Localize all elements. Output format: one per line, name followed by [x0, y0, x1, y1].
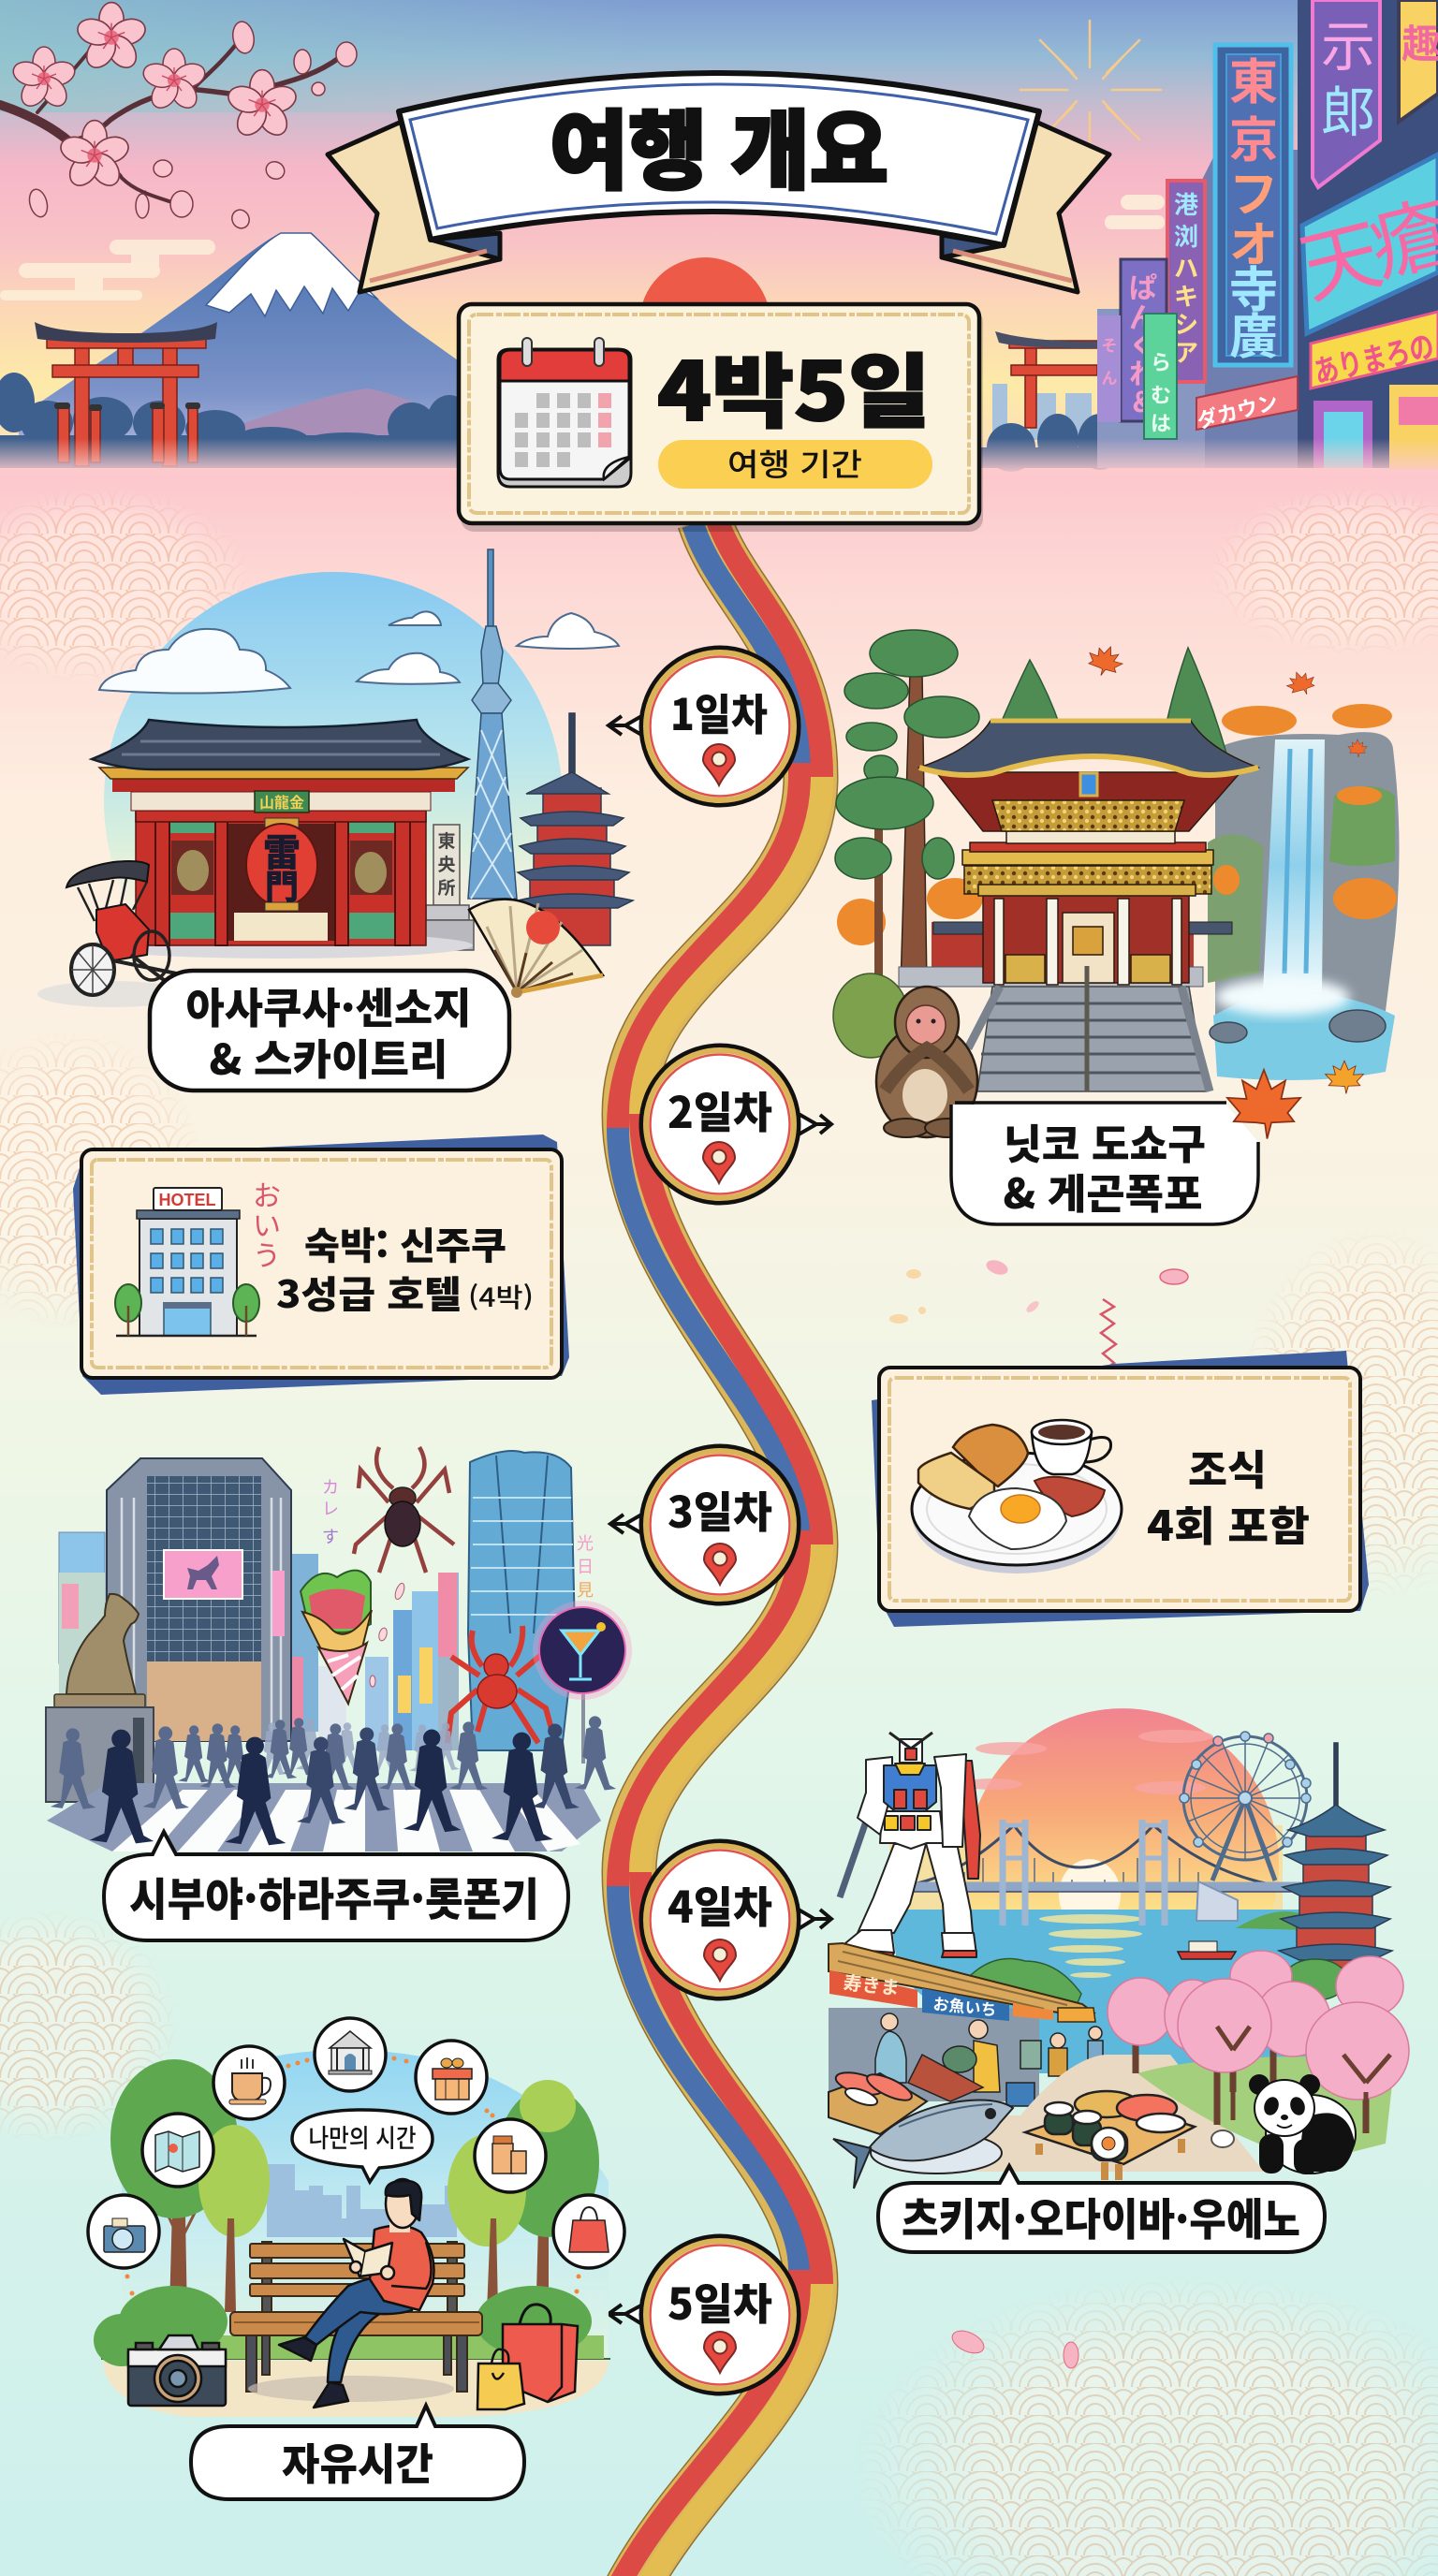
- lantern: 雷: [263, 823, 301, 877]
- sign: vertical blue: 京: [1229, 101, 1278, 171]
- green tree: [1284, 1959, 1347, 2000]
- dotted trail: [125, 2056, 580, 2295]
- banner face: [399, 73, 1039, 245]
- icon: hotel: HOTEL: [159, 1191, 216, 1209]
- banner tails: [328, 117, 1109, 292]
- white sun: [1059, 1859, 1121, 1910]
- cloud: header left: [0, 240, 215, 300]
- label: Asakusa: & 스카이트리: [210, 1026, 448, 1087]
- park sky: [122, 2050, 609, 2359]
- sign: vertical blue: フ: [1229, 155, 1278, 226]
- ribbon gold body: [629, 520, 811, 2576]
- sign: teal diagonal: 天: [1288, 191, 1392, 320]
- sign: vertical blue: 廣: [1229, 298, 1278, 368]
- sign: yellow top: [1399, 0, 1438, 122]
- title text: 여행 개요: [550, 82, 888, 207]
- ferry: [1178, 1941, 1236, 1959]
- spider dark: [354, 1447, 454, 1573]
- pagoda: [518, 713, 633, 945]
- lantern: 門: [265, 860, 299, 909]
- ribbon gold bands: [640, 777, 822, 2576]
- cedar trees: [835, 630, 979, 988]
- skytree: [468, 549, 517, 899]
- label: Tsukiji: 츠키지·오다이바·우에노: [902, 2184, 1300, 2248]
- person reading: [279, 2179, 434, 2408]
- sign: vertical blue: 寺: [1229, 251, 1278, 321]
- green bush behind roof: [966, 1958, 1081, 2005]
- sign: narrow pink: 港: [1174, 186, 1198, 221]
- stone monument: 央: [437, 851, 456, 876]
- grass: [1137, 2056, 1395, 2162]
- gate name plate: 山龍金: [259, 790, 304, 812]
- shopping bags: [477, 2305, 578, 2409]
- shrine wings: [932, 922, 1194, 978]
- scene: Tsukiji Odaiba Ueno: [829, 1708, 1409, 2252]
- panda: [1249, 2074, 1356, 2174]
- sky circle: [104, 572, 563, 1031]
- kana note: お: [253, 1173, 281, 1214]
- sign: purple mid: く: [1129, 323, 1157, 364]
- sign: green: む: [1151, 379, 1171, 409]
- clouds: [99, 611, 619, 694]
- pill: travel period: [658, 440, 932, 489]
- bush: [833, 973, 908, 1058]
- sign: pink canopy: ダカウン: [1194, 386, 1281, 434]
- icon: shops bubble: [475, 2119, 546, 2192]
- icon: calendar: [498, 338, 631, 487]
- day badge 5: [609, 2236, 799, 2393]
- pagoda: [1279, 1743, 1392, 1981]
- sign: narrow pink: キ: [1174, 278, 1198, 313]
- maple leaf: large: [1227, 1070, 1300, 1138]
- lantern: [246, 818, 317, 911]
- kana pink: カ: [322, 1474, 339, 1499]
- ground: [89, 932, 473, 959]
- day badge 1: [609, 648, 799, 805]
- sign: teal diagonal: [1288, 154, 1438, 333]
- label: Nikko: & 게곤폭포: [1004, 1161, 1202, 1221]
- sign: vertical blue: オ: [1229, 206, 1278, 276]
- tuna fish: [833, 2100, 1013, 2188]
- icon: hotel: [115, 1188, 259, 1336]
- back trees: [1000, 648, 1228, 760]
- speech bubble: my own time: 나만의 시간: [309, 2118, 416, 2155]
- city silhouette: [267, 2164, 457, 2237]
- kana pink: 光: [577, 1530, 594, 1555]
- crowd mid: [51, 1716, 616, 1809]
- stone monument: 東: [437, 827, 456, 853]
- duration card: [459, 304, 983, 532]
- blossoms: [1108, 1951, 1409, 2100]
- frieze: [112, 777, 455, 792]
- maple leaves: [1083, 641, 1367, 1093]
- hotel card: [73, 1134, 569, 1395]
- sign: small purple: [1097, 315, 1121, 422]
- day badge 2: 2일차: [668, 1079, 772, 1141]
- sign: purple mid: &: [1133, 379, 1153, 420]
- market sign blue: お魚いち: [932, 1991, 998, 2021]
- trunks: [1119, 2017, 1395, 2133]
- kana squiggle: [1093, 1299, 1116, 1387]
- torii gate left: [35, 322, 217, 466]
- crowd front: [90, 1730, 553, 1845]
- day badge 1: 1일차: [670, 681, 768, 743]
- hotel text: 3성급 호텔: [276, 1265, 462, 1319]
- label: Tsukiji: [878, 2166, 1325, 2252]
- pool: [1213, 992, 1395, 1080]
- spider red: [448, 1626, 554, 1743]
- pill: travel period: 여행 기간: [727, 440, 862, 485]
- kana pink: [322, 1474, 594, 1602]
- crosswalk: [47, 1783, 601, 1852]
- kana pink: す: [322, 1524, 339, 1548]
- label: Asakusa: [150, 971, 509, 1090]
- market: [829, 1943, 1264, 2172]
- ribbon: [618, 515, 822, 2576]
- sun clouds: [962, 1730, 1213, 1794]
- hotel text: 숙박: 신주쿠: [304, 1216, 506, 1270]
- kana pink: 日: [577, 1554, 594, 1578]
- street buildings: [290, 1554, 459, 1750]
- label: Nikko: 닛코 도쇼구: [1004, 1111, 1206, 1171]
- storefronts: [1313, 385, 1438, 469]
- label: Nikko: [951, 1103, 1258, 1224]
- day badge 4: 4일차: [668, 1874, 772, 1936]
- label: free time: [191, 2406, 524, 2499]
- rickshaw: [37, 861, 199, 1007]
- bridge: [898, 1820, 1301, 1925]
- sign: purple top: 郎: [1321, 68, 1375, 147]
- shrine roof: [919, 721, 1258, 831]
- ribbon blue bands: [618, 524, 800, 2270]
- sign: narrow pink: ア: [1174, 334, 1198, 369]
- stone monument: 所: [437, 874, 456, 900]
- scene: Asakusa and Skytree: [37, 549, 633, 1090]
- cherry blossom branch: [0, 3, 357, 231]
- duration text: 4박5일: [657, 327, 931, 444]
- label: free time: 자유시간: [282, 2431, 433, 2493]
- gundam robot: [840, 1733, 980, 1958]
- rice ball: [1211, 2130, 1234, 2147]
- label: Shibuya: [104, 1832, 568, 1940]
- market sign red: 寿きま: [843, 1968, 901, 2000]
- left side buildings: [59, 1532, 105, 1704]
- scene: free time: [88, 2018, 624, 2499]
- kana note: い: [253, 1203, 281, 1244]
- scene: Shibuya Harajuku Roppongi: [46, 1447, 632, 1940]
- hotel text: (4박): [468, 1278, 534, 1315]
- cloud: header right: [1105, 195, 1165, 229]
- sign: narrow pink: 浏: [1174, 218, 1198, 253]
- breakfast text: [1147, 1437, 1310, 1553]
- bench shadow: [248, 2376, 454, 2402]
- water: [889, 1910, 1306, 2073]
- icon: bag bubble: [553, 2195, 624, 2268]
- sign: narrow pink: シ: [1174, 306, 1198, 341]
- red sun: [639, 257, 770, 388]
- stone monument: [419, 825, 474, 950]
- icon: breakfast plate: [912, 1420, 1122, 1573]
- sign: green: ら: [1151, 346, 1171, 376]
- backdrop towers: [1097, 0, 1438, 468]
- steps: [968, 966, 1210, 1091]
- Hachiko statue: [46, 1594, 154, 1802]
- icon: camera bubble: [88, 2195, 159, 2268]
- sign: purple mid: [1121, 259, 1167, 421]
- kana pink: 見: [577, 1577, 594, 1602]
- breakfast text: 조식: [1188, 1437, 1267, 1497]
- speech bubble: my own time: [292, 2110, 433, 2182]
- market sign blue: [922, 1988, 1009, 2021]
- main building: [107, 1458, 291, 1741]
- icon: coffee bubble: [213, 2046, 285, 2119]
- breakfast card: [872, 1351, 1369, 1627]
- awning: [829, 1943, 1093, 2012]
- kana note: う: [253, 1233, 281, 1274]
- sunset disc: [966, 1708, 1279, 1910]
- day badge 3: 3일차: [668, 1479, 772, 1541]
- icon: vintage camera: [128, 2335, 226, 2406]
- sunset sky wash: [889, 1825, 1283, 1911]
- tower: [468, 1451, 575, 1750]
- sign: vertical blue: 東: [1229, 43, 1278, 113]
- title banner: [328, 73, 1109, 292]
- stall vendors: [875, 2013, 1103, 2106]
- sign: purple top: [1313, 0, 1380, 187]
- mountain: Fuji: [19, 233, 477, 459]
- shrine lower storey: [983, 894, 1189, 985]
- sign: small purple: そ: [1101, 332, 1118, 356]
- icon: gift bubble: [416, 2041, 487, 2114]
- sign: narrow pink: [1167, 181, 1205, 382]
- hotel text: [276, 1216, 534, 1319]
- sushi board: [1025, 2091, 1195, 2180]
- icon: map bubble: [142, 2114, 213, 2187]
- ferris wheel: [1180, 1732, 1311, 1881]
- icon: museum bubble: [315, 2018, 386, 2091]
- crepe: [301, 1571, 372, 1704]
- label: Asakusa: 아사쿠사·센소지: [185, 974, 472, 1035]
- kana pink: レ: [322, 1496, 339, 1520]
- green hill: [1236, 1911, 1311, 1930]
- tree line left: [0, 373, 477, 468]
- waterfall mist: [1215, 978, 1350, 1016]
- day badge 5: 5일차: [668, 2271, 772, 2333]
- rock cliff: [1215, 732, 1400, 1016]
- bench: [230, 2242, 482, 2392]
- day badge 2: [641, 1046, 831, 1203]
- sign: purple top: 示: [1321, 3, 1375, 81]
- sign: small purple: ん: [1101, 365, 1118, 388]
- market sign orange: [1013, 2003, 1053, 2020]
- petals near crepe: [370, 1582, 406, 1687]
- sign: green: は: [1151, 407, 1171, 437]
- crowd near: [297, 1723, 580, 1824]
- ribbon red bands: [618, 515, 822, 2576]
- folding fan: [469, 900, 603, 998]
- market sign red: [829, 1968, 917, 2008]
- neon buildings: [1097, 0, 1438, 469]
- sashimi counter: [829, 2069, 927, 2134]
- market ground: [899, 2055, 1264, 2172]
- sign: purple mid: ん: [1129, 295, 1157, 336]
- right trees: [448, 2080, 599, 2357]
- sign: green: [1144, 314, 1177, 439]
- cherry trees: [1108, 1951, 1409, 2162]
- monkey: [876, 987, 977, 1137]
- kana note: [253, 1173, 281, 1274]
- ground: [103, 2359, 609, 2417]
- autumn foliage: [837, 704, 1397, 945]
- falling petals: [889, 1257, 1188, 2368]
- roof: [92, 720, 468, 769]
- waterfall: [1263, 739, 1325, 992]
- left trees: [94, 2059, 270, 2366]
- shrine middle storey: [962, 828, 1213, 896]
- kaminarimon gate: [92, 720, 468, 945]
- sign: vertical blue: [1215, 43, 1291, 368]
- skyline fade to pink: [0, 438, 1438, 476]
- label: Shibuya: 시부야·하라주쿠·롯폰기: [129, 1863, 539, 1928]
- breakfast text: 4회 포함: [1147, 1493, 1310, 1553]
- sign: purple mid: ぱ: [1129, 265, 1157, 306]
- neon cocktail sign: [533, 1601, 632, 1764]
- fireworks: [1020, 21, 1161, 161]
- day badge 4: [641, 1841, 831, 1998]
- sign: purple mid: れ: [1129, 351, 1157, 392]
- crowd far: [258, 1718, 459, 1775]
- scene: Nikko Toshogu and Kegon Falls: [833, 630, 1400, 1224]
- sign: narrow pink: ハ: [1174, 250, 1198, 285]
- day badge 3: [610, 1446, 799, 1603]
- torii gate right with skyline: [981, 331, 1123, 472]
